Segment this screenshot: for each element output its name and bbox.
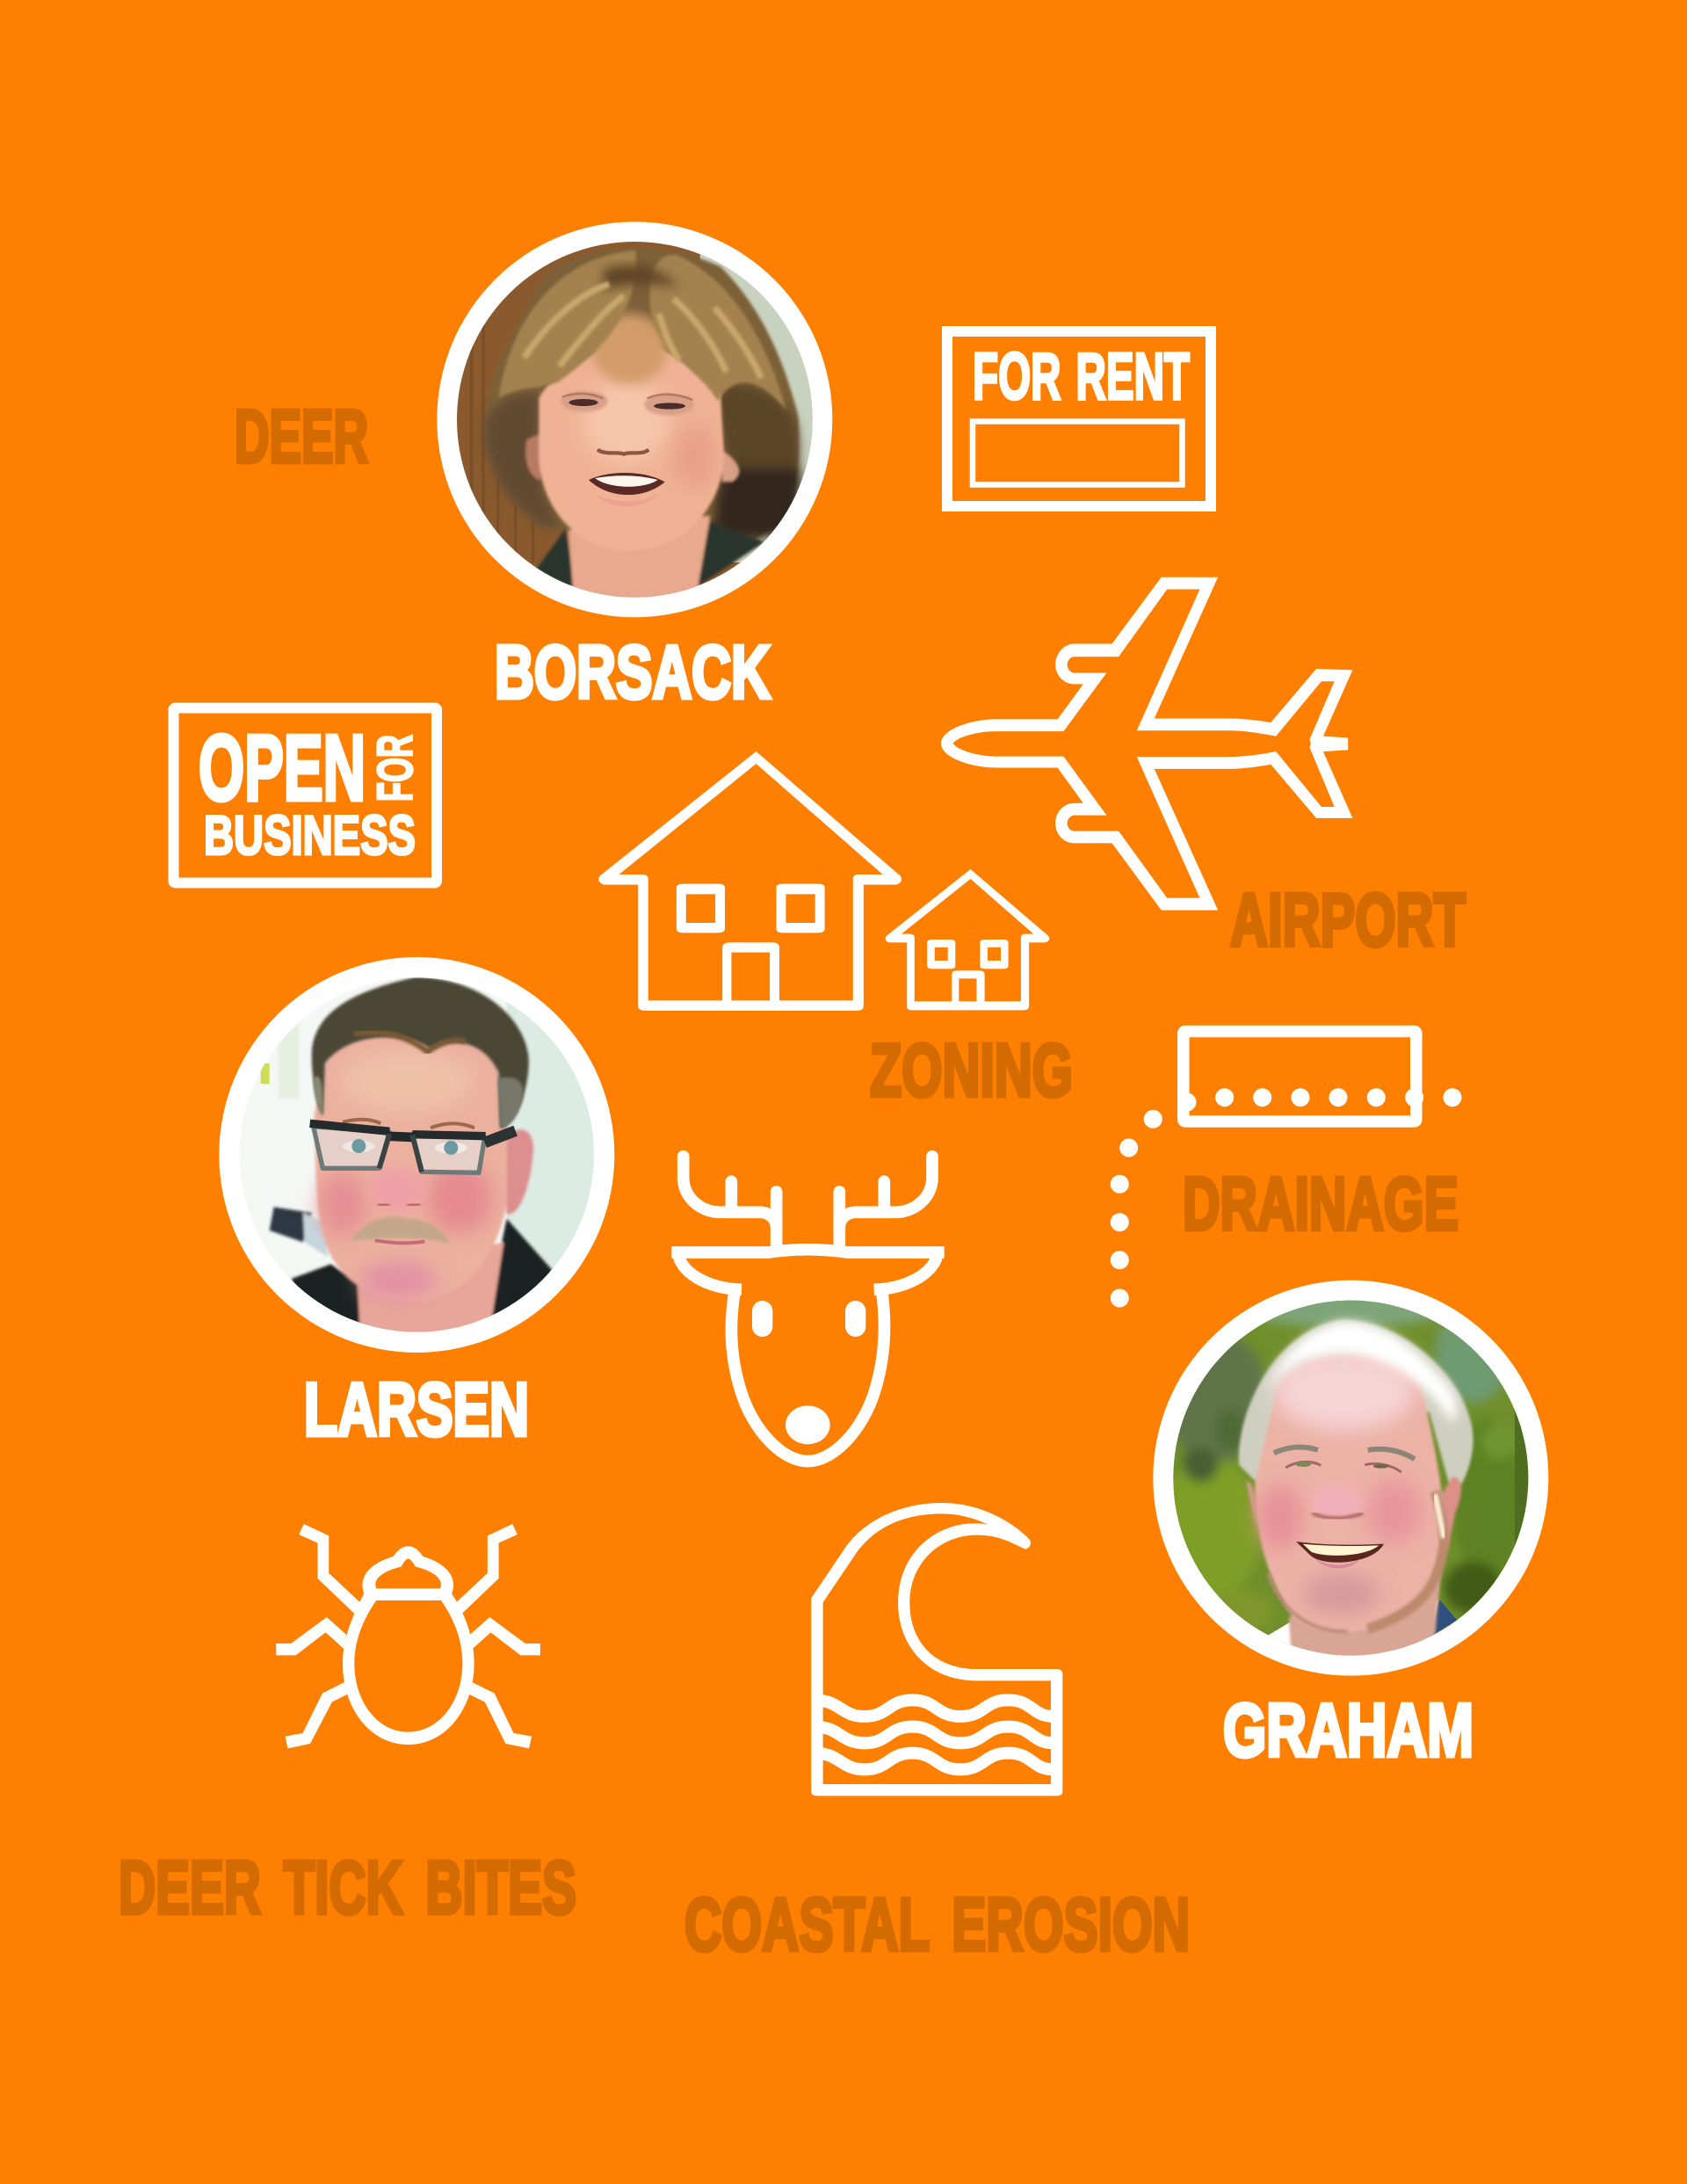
icon: drainage culvert with water dots (1111, 1032, 1462, 1308)
icon: open for business sign: BUSINESS (204, 805, 416, 867)
infographic canvas (120, 221, 1548, 1953)
issue label: deer: DEER (235, 395, 368, 479)
portrait: Larsen (219, 957, 614, 1353)
icon: for rent sign (947, 331, 1211, 506)
icon: deer head (671, 1157, 945, 1462)
icon: open for business sign: FOR (367, 735, 424, 802)
icon: tick bug (276, 1524, 540, 1748)
portrait: Borsack (437, 221, 832, 617)
name label: Borsack: BORSACK (495, 631, 771, 715)
issue label: drainage: DRAINAGE (1183, 1163, 1459, 1246)
name label: Larsen: LARSEN (304, 1368, 529, 1452)
issue label: coastal erosion: COASTAL EROSION (684, 1883, 1190, 1967)
icon: open for business sign: OPEN (199, 716, 366, 820)
name label: Graham: GRAHAM (1223, 1689, 1473, 1773)
icon: coastal wave (811, 1503, 1062, 1796)
icon: airplane (941, 577, 1352, 911)
issue label: airport: AIRPORT (1230, 879, 1466, 962)
issue label: zoning: ZONING (870, 1029, 1073, 1113)
issue label: deer tick bites: DEER TICK BITES (119, 1847, 576, 1930)
icon: open for business sign (174, 708, 437, 882)
portrait: Graham (1153, 1281, 1548, 1676)
icon: large and small houses (598, 751, 1049, 1011)
icon: for rent sign: FOR RENT (973, 339, 1190, 413)
